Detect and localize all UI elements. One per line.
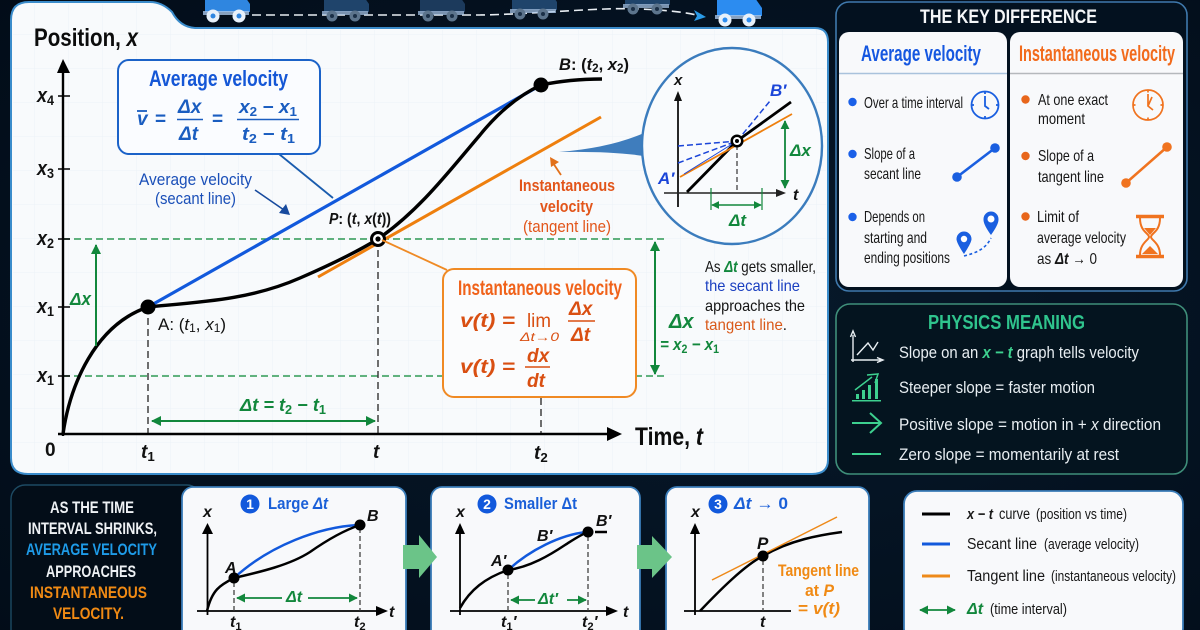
y-axis tick labels: 2 <box>47 235 54 251</box>
panel heading: PHYSICS MEANING <box>928 312 1085 334</box>
column: instantaneous velocity: average velocity <box>1037 230 1126 247</box>
panel: summary text: APPROACHES <box>46 562 136 581</box>
callout: average velocity formula: 2 <box>250 105 257 119</box>
mini graph: P <box>757 534 769 553</box>
axis title: time: Time, t <box>635 423 704 451</box>
callout connector: average velocity <box>279 154 333 198</box>
callout: instantaneous velocity formula <box>443 269 636 397</box>
column: instantaneous velocity: as Δt → 0 <box>1037 251 1097 268</box>
tangent note: = v(t) <box>798 600 841 618</box>
mini graph: B′ <box>596 513 613 530</box>
panel: summary text: AVERAGE VELOCITY <box>26 540 157 559</box>
callout: average velocity formula: v <box>137 109 149 130</box>
y-axis tick labels: 1 <box>47 303 54 319</box>
tangent note <box>778 562 859 618</box>
label: delta t: 2 <box>285 403 292 417</box>
arrow: delta x left <box>95 245 97 346</box>
secant line <box>148 85 541 307</box>
callout: average velocity formula: = <box>155 109 166 130</box>
label A: 1 <box>214 321 221 335</box>
magnifier inset: Δt <box>728 211 747 230</box>
callout: average velocity formula <box>118 60 320 154</box>
step heading: Δt → 0 <box>733 495 788 513</box>
callout: average velocity formula: 1 <box>287 132 295 146</box>
icon: route pins <box>956 212 998 256</box>
column: average velocity <box>839 32 1007 287</box>
legend: tangent line: Tangent line <box>967 568 1045 585</box>
mini graph: Δt′ <box>537 591 559 608</box>
truck 5 <box>623 0 670 14</box>
truck 1 <box>203 0 250 22</box>
legend: x-t curve <box>922 506 1127 523</box>
y-axis tick labels: 4 <box>47 92 54 108</box>
icon: secant segment <box>952 143 1000 182</box>
icon: x-t graph <box>850 331 883 362</box>
callout: instantaneous velocity formula: Instantaneous velocity <box>458 277 622 300</box>
step heading: Large Δt <box>268 495 329 513</box>
callout: average velocity formula: Δx <box>177 97 203 118</box>
panel frame <box>836 2 1187 291</box>
card: step 2 smaller delta t <box>431 487 640 630</box>
label: tangent line: velocity <box>540 197 593 216</box>
label B: , <box>599 55 608 74</box>
label A: 1 <box>189 321 196 335</box>
label: delta t: 1 <box>319 403 326 417</box>
step badge <box>478 494 496 514</box>
callout: average velocity formula: − x <box>257 97 291 117</box>
callout: instantaneous velocity formula: Δt <box>570 325 591 346</box>
y-axis tick labels <box>36 85 54 388</box>
x-axis tick labels: 1 <box>147 449 155 464</box>
x-axis tick labels <box>45 440 548 465</box>
column: average velocity: Over a time interval <box>864 95 963 112</box>
arrow: step 1 to step 2 <box>403 535 437 578</box>
label B: ) <box>623 55 629 74</box>
tangent line <box>318 117 601 277</box>
step badge <box>240 494 260 514</box>
callout: average velocity formula: x <box>239 97 249 117</box>
label: delta x right: Δx <box>668 311 694 333</box>
column: average velocity: Slope of a <box>864 146 915 163</box>
legend <box>904 491 1183 630</box>
mini graph: x <box>455 504 466 521</box>
legend: x-t curve: curve <box>999 506 1030 523</box>
callout: average velocity formula: t <box>242 124 248 144</box>
icon: flat line <box>852 453 881 455</box>
row text: Slope on an x − t graph tells velocity <box>899 343 1139 362</box>
x-axis tick labels: 2 <box>540 450 548 465</box>
panel: summary text: INSTANTANEOUS <box>30 583 147 602</box>
step badge: 2 <box>483 496 491 512</box>
callout: instantaneous velocity formula: dt <box>527 371 546 392</box>
truck 6 <box>715 0 762 26</box>
y-axis tick labels: x <box>37 85 48 107</box>
label B: x <box>607 55 619 74</box>
panel: the key difference <box>836 2 1187 291</box>
arrow: delta t <box>152 420 375 422</box>
label: secant line <box>139 171 253 208</box>
row text <box>899 343 1161 464</box>
legend box <box>904 491 1183 630</box>
label: delta x left: Δx <box>69 289 92 309</box>
truck 2 <box>322 0 369 22</box>
column: instantaneous velocity: Slope of a <box>1038 148 1094 165</box>
arrow: step 2 to step 3 <box>637 536 672 578</box>
label A: , <box>196 315 205 334</box>
label A: ) <box>220 315 226 334</box>
point A <box>140 300 156 314</box>
mini graph: t <box>623 604 629 621</box>
label A: x <box>204 315 214 334</box>
icon: rising bars <box>852 374 881 402</box>
note: delta t gets smaller: the secant line <box>705 278 800 295</box>
column: instantaneous velocity <box>1010 32 1183 287</box>
tangent note: at P <box>805 582 835 600</box>
label: delta x right: 1 <box>713 342 719 356</box>
legend: secant line <box>922 536 1139 553</box>
magnifier inset: x <box>673 72 683 89</box>
label: tangent line: Instantaneous <box>519 176 615 195</box>
truck 4 <box>510 0 557 20</box>
callout: instantaneous velocity formula: Δt→0 <box>519 330 559 344</box>
step badge: 1 <box>246 496 254 512</box>
callout: average velocity formula: Δt <box>178 124 199 145</box>
legend: delta t: (time interval) <box>990 601 1067 618</box>
step badge <box>708 494 728 514</box>
x-axis tick labels: t <box>373 442 380 463</box>
callout: instantaneous velocity formula: Δx <box>568 299 594 320</box>
callout: average velocity formula: 2 <box>249 132 257 146</box>
column: instantaneous velocity: Limit of <box>1037 209 1079 226</box>
y-axis tick labels: 1 <box>47 372 54 388</box>
panel: summary text: VELOCITY. <box>53 604 124 623</box>
arrow: tangent label <box>550 157 561 175</box>
callout connector: instantaneous <box>382 240 447 270</box>
mini graph: x <box>690 504 701 521</box>
icon: tangent segment <box>1121 142 1172 188</box>
column: average velocity: Average velocity <box>861 41 982 66</box>
callout: average velocity formula: Average velocity <box>149 66 289 91</box>
arrow: secant label <box>255 190 290 215</box>
label B: B: (t <box>559 55 592 74</box>
dashed motion path <box>252 9 701 16</box>
callout: average velocity formula: 1 <box>290 105 297 119</box>
panel: summary text: INTERVAL SHRINKS, <box>28 519 157 538</box>
mini graph: Δt <box>285 589 303 606</box>
callout: instantaneous velocity formula: v(t) = <box>460 311 515 332</box>
card: step 1 large delta t <box>182 487 406 630</box>
magnifier inset: B′ <box>770 81 787 100</box>
legend: secant line: Secant line <box>967 536 1037 553</box>
label: secant line: Average velocity <box>139 171 253 189</box>
row text: Steeper slope = faster motion <box>899 378 1095 397</box>
panel background <box>11 2 828 474</box>
mini graph <box>197 504 395 630</box>
column: average velocity: starting and <box>864 230 927 247</box>
magnifier inset: Δx <box>789 141 812 160</box>
mini graph: A <box>224 560 237 577</box>
note: delta t gets smaller <box>705 259 816 334</box>
label: tangent line: (tangent line) <box>523 217 611 236</box>
legend: x-t curve: (position vs time) <box>1036 506 1127 523</box>
note: delta t gets smaller: tangent line. <box>705 317 787 334</box>
point P <box>370 231 386 247</box>
point B <box>534 78 548 92</box>
axis title: position: Position, x <box>34 24 139 52</box>
magnifier inset <box>642 48 822 244</box>
x-axis tick labels: t <box>534 443 540 464</box>
label: delta x right: = x <box>660 335 684 354</box>
y-axis tick labels: x <box>37 296 48 318</box>
mini graph: B <box>367 508 379 525</box>
label: tangent line <box>519 176 615 236</box>
icon: hourglass <box>1136 216 1164 256</box>
callout: instantaneous velocity formula: lim <box>527 311 551 332</box>
guide lines <box>63 239 668 434</box>
x-t curve <box>63 79 602 434</box>
label: delta t: Δt = t <box>240 395 285 415</box>
mini graph: t <box>389 604 395 621</box>
label: delta x right <box>660 311 719 356</box>
mini graph: A′ <box>490 553 508 570</box>
magnifier inset: t <box>793 187 799 204</box>
panel: summary text: AS THE TIME <box>50 498 134 517</box>
motion arrowhead <box>694 10 706 21</box>
mini graph <box>450 504 629 630</box>
label B: 2 <box>592 61 599 75</box>
column: instantaneous velocity: tangent line <box>1038 169 1104 186</box>
legend: delta t <box>920 601 1067 618</box>
row text: Zero slope = momentarily at rest <box>899 445 1119 464</box>
card: step 3 delta t to zero <box>666 487 869 630</box>
axes <box>57 59 622 441</box>
y-axis tick labels: 3 <box>47 165 54 181</box>
label A: A: (t <box>158 315 189 334</box>
label: delta t: − t <box>292 395 320 415</box>
arrow: delta x right <box>654 242 656 374</box>
callout: average velocity formula: = <box>212 109 223 130</box>
header: truck motion strip <box>203 0 762 26</box>
legend: secant line: (average velocity) <box>1044 536 1139 553</box>
legend: delta t: Δt <box>966 601 984 618</box>
label B: 2 <box>617 61 624 75</box>
truck 3 <box>418 0 465 22</box>
mini graph <box>684 504 842 630</box>
icon: blue clock <box>972 92 998 118</box>
note: delta t gets smaller: As Δt gets smaller, <box>705 259 816 276</box>
column: average velocity: Depends on <box>864 209 925 226</box>
tangent note: Tangent line <box>778 562 859 580</box>
legend: tangent line <box>922 568 1176 585</box>
callout: instantaneous velocity formula: v(t) = <box>460 357 515 378</box>
panel frame <box>836 304 1187 474</box>
column: average velocity: secant line <box>864 166 921 183</box>
label: secant line: (secant line) <box>155 190 236 208</box>
label: delta x right: 2 <box>681 342 688 356</box>
mini graph: B′ <box>537 528 554 545</box>
panel heading: THE KEY DIFFERENCE <box>920 7 1097 28</box>
panel: main position-time graph <box>11 2 828 474</box>
panel: physics meaning <box>836 304 1187 474</box>
callout: instantaneous velocity formula: dx <box>527 346 551 367</box>
x-axis tick labels: 0 <box>45 440 56 461</box>
panel: summary text <box>11 485 201 630</box>
mini graph: x <box>202 504 213 521</box>
legend: x-t curve: x − t <box>966 506 994 523</box>
magnifier wedge <box>559 133 644 156</box>
y-axis tick labels: x <box>37 228 48 250</box>
icon: orange clock <box>1133 90 1163 120</box>
column: instantaneous velocity: At one exact <box>1038 92 1108 109</box>
callout: average velocity formula: − t <box>257 124 288 144</box>
icon: right arrow <box>852 413 881 433</box>
column: average velocity: ending positions <box>864 250 950 267</box>
label: delta x right: − x <box>687 335 714 354</box>
step badge: 3 <box>714 496 722 512</box>
y-axis tick labels: x <box>37 158 48 180</box>
column: instantaneous velocity: moment <box>1038 111 1085 128</box>
row text: Positive slope = motion in + x direction <box>899 415 1161 434</box>
y-axis tick labels: x <box>37 365 48 387</box>
x-axis tick labels: t <box>141 442 147 463</box>
label P: P: (t, x(t)) <box>329 211 391 228</box>
step heading: Smaller Δt <box>504 495 577 513</box>
magnifier inset: A′ <box>657 169 675 188</box>
note: delta t gets smaller: approaches the <box>705 298 805 315</box>
